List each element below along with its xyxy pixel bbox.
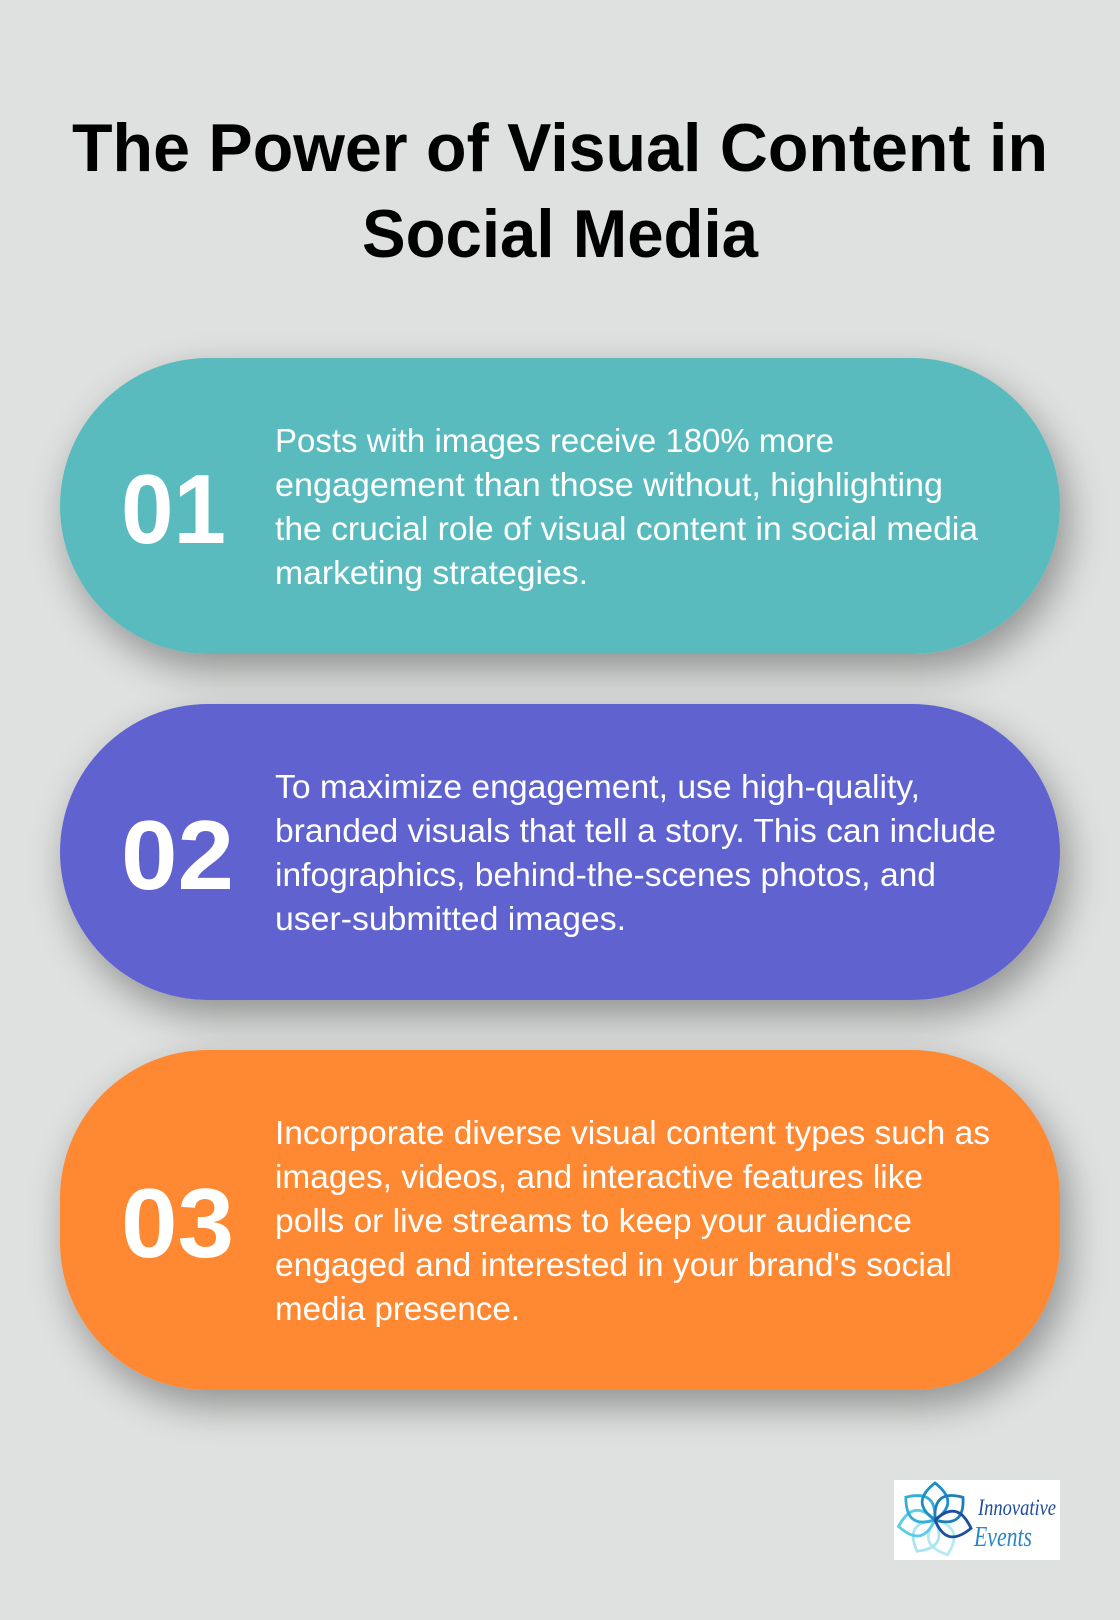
panel: step 01 [60,358,1060,654]
title [72,110,1048,272]
number 02: 02 [121,800,234,910]
text block 03: engaged and interested in your brand's social [275,1246,952,1283]
number 03: 03 [121,1168,234,1278]
text block 02: branded visuals that tell a story. This can include [275,812,996,849]
text block 01: engagement than those without, highlighting [275,466,943,503]
text block 01 [275,422,979,591]
text block 02: user-submitted images. [275,900,626,937]
title: Social Media [362,196,759,272]
logo: Innovative Events [894,1480,1060,1560]
icon: flower [896,1483,974,1559]
text block 03: media presence. [275,1290,520,1327]
text block 02 [275,768,996,937]
text block 03 [275,1114,990,1327]
text block 03: polls or live streams to keep your audience [275,1202,912,1239]
text block 02: infographics, behind-the-scenes photos, and [275,856,936,893]
pill background 03 [60,1050,1060,1390]
text block 01: Posts with images receive 180% more [275,422,834,459]
logo wordmark: Innovative [977,1495,1056,1520]
text block 03: images, videos, and interactive features like [275,1158,923,1195]
text block 01: marketing strategies. [275,554,588,591]
panel: step 03 [60,1050,1060,1390]
text block 03: Incorporate diverse visual content types such as [275,1114,990,1151]
number 01: 01 [121,454,226,564]
title: The Power of Visual Content in [72,110,1048,186]
pill background 02 [60,704,1060,1000]
text block 01: the crucial role of visual content in social media [275,510,979,547]
text block 02: To maximize engagement, use high-quality, [275,768,920,805]
logo wordmark: Events [973,1522,1032,1553]
logo wordmark [973,1495,1056,1553]
pill background 01 [60,358,1060,654]
panel: step 02 [60,704,1060,1000]
